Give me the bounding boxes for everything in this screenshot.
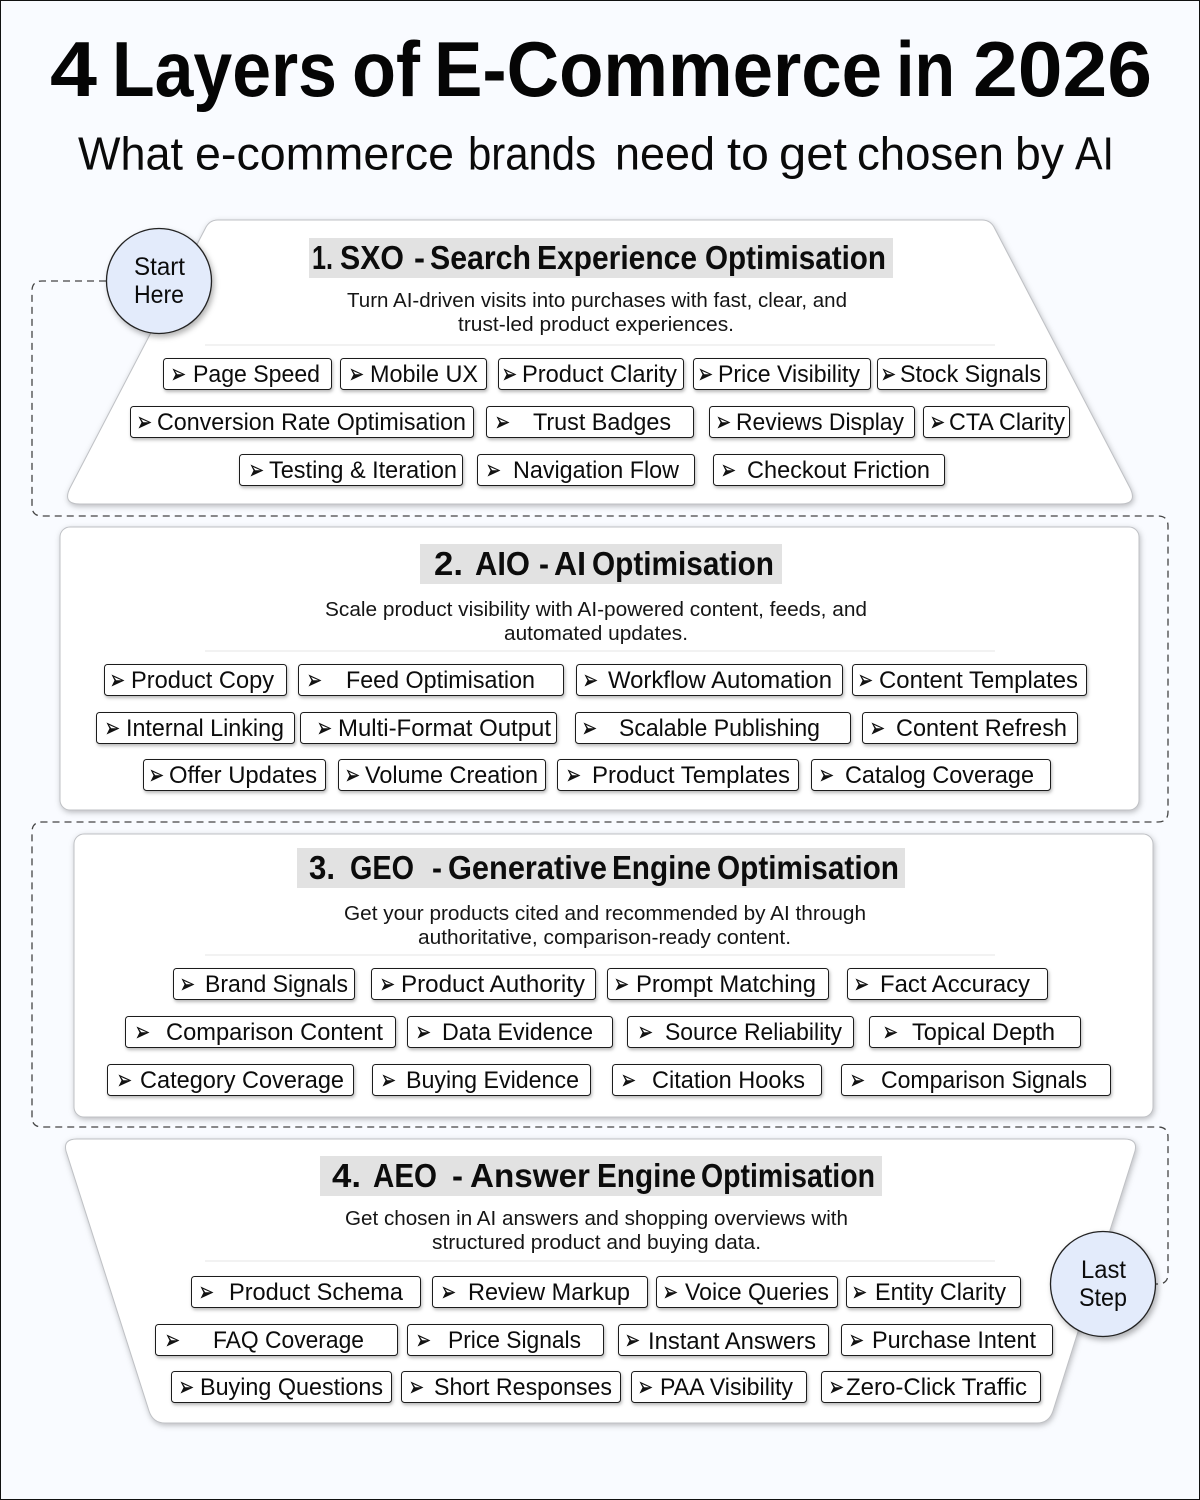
description: AIO: automated updates.	[504, 622, 688, 645]
tag: Purchase Intent: Purchase Intent	[872, 1327, 1036, 1354]
heading: AIO: AIO	[475, 545, 530, 582]
title	[50, 25, 1152, 113]
description: AIO: Scale product visibility with AI-powered content, feeds, and	[325, 598, 867, 621]
tag: Product Copy	[104, 664, 286, 696]
tag: Workflow Automation: Workflow Automation	[608, 667, 832, 694]
heading: AIO: AI	[554, 545, 586, 582]
tag: Mobile UX	[340, 358, 486, 390]
heading: SXO: SXO	[340, 239, 404, 276]
heading: SXO: Experience	[537, 239, 697, 276]
heading: GEO: 3.	[309, 849, 335, 886]
tag: Comparison Signals: Comparison Signals	[881, 1067, 1087, 1094]
title: in	[896, 25, 955, 113]
tag: Product Authority: Product Authority	[401, 971, 585, 998]
tag: Review Markup: Review Markup	[468, 1279, 630, 1306]
heading: AEO: Engine	[597, 1157, 696, 1194]
subtitle: chosen	[857, 128, 1004, 180]
tag: Content Refresh: Content Refresh	[896, 715, 1067, 742]
subtitle: e-commerce	[195, 128, 454, 180]
tag: Internal Linking: Internal Linking	[126, 715, 284, 742]
badge: Last Step	[1050, 1232, 1156, 1336]
title: Layers	[112, 25, 337, 113]
heading: GEO: GEO	[350, 849, 414, 886]
tag: Data Evidence: Data Evidence	[442, 1019, 593, 1046]
tag: Source Reliability: Source Reliability	[665, 1019, 842, 1046]
heading: AIO	[420, 544, 782, 584]
tag: Product Clarity: Product Clarity	[522, 361, 677, 388]
title: 2026	[973, 25, 1152, 113]
subtitle: get	[779, 128, 847, 180]
heading: AEO: 4.	[332, 1157, 361, 1194]
tag: Voice Queries: Voice Queries	[685, 1279, 829, 1306]
tag: Review Markup	[432, 1276, 648, 1308]
subtitle	[78, 128, 1114, 180]
tag: Buying Evidence: Buying Evidence	[406, 1067, 579, 1094]
description: GEO	[344, 902, 866, 949]
tag: Price Signals	[408, 1324, 604, 1356]
tag: PAA Visibility: PAA Visibility	[660, 1374, 793, 1401]
tag: Entity Clarity	[846, 1276, 1020, 1308]
description: AEO	[345, 1207, 848, 1254]
description: SXO	[347, 289, 847, 336]
tag: Zero-Click Traffic: Zero-Click Traffic	[846, 1374, 1027, 1401]
tag: Volume Creation: Volume Creation	[365, 762, 538, 789]
tag: CTA Clarity: CTA Clarity	[949, 409, 1065, 436]
heading: GEO: Generative	[448, 849, 607, 886]
description: SXO: trust-led product experiences.	[458, 313, 734, 336]
tag: Fact Accuracy: Fact Accuracy	[880, 971, 1030, 998]
panel: AEO	[65, 1139, 1136, 1423]
tag: Purchase Intent	[842, 1324, 1052, 1356]
tag: Content Templates: Content Templates	[879, 667, 1078, 694]
tag: Scalable Publishing	[576, 712, 850, 744]
tag: Price Visibility: Price Visibility	[718, 361, 860, 388]
tag: Data Evidence	[408, 1016, 612, 1048]
tag: Feed Optimisation: Feed Optimisation	[346, 667, 535, 694]
dashed connector path	[32, 281, 1168, 1284]
tag: Feed Optimisation	[298, 664, 564, 696]
title: 4	[50, 25, 97, 113]
tag: Citation Hooks	[612, 1064, 822, 1096]
heading: GEO: -	[432, 849, 442, 886]
tag: Offer Updates: Offer Updates	[169, 762, 317, 789]
tag: Product Schema	[192, 1276, 420, 1308]
tag: Instant Answers: Instant Answers	[648, 1328, 816, 1355]
heading: SXO: Search	[430, 239, 531, 276]
tag: Citation Hooks: Citation Hooks	[652, 1067, 805, 1094]
tag: FAQ Coverage: FAQ Coverage	[213, 1327, 364, 1354]
tag: Buying Questions: Buying Questions	[200, 1374, 383, 1401]
tag: Entity Clarity: Entity Clarity	[875, 1279, 1006, 1306]
subtitle: What	[78, 128, 183, 180]
panel shape: AIO rectangle	[60, 527, 1139, 810]
heading: AEO	[320, 1156, 882, 1196]
tag: Navigation Flow	[478, 454, 694, 486]
description: SXO: Turn AI-driven visits into purchases with fast, clear, and	[347, 289, 847, 312]
badge: Last Step: Step	[1079, 1284, 1127, 1312]
heading: AEO: Optimisation	[701, 1157, 875, 1194]
tag: Conversion Rate Optimisation: Conversion Rate Optimisation	[157, 409, 466, 436]
tag: Product Schema: Product Schema	[229, 1279, 404, 1306]
panel: SXO	[68, 220, 1132, 504]
badge: Start Here: Here	[134, 281, 184, 309]
subtitle: to	[727, 128, 769, 180]
tag: Product Copy: Product Copy	[131, 667, 274, 694]
subtitle: brands	[468, 128, 596, 180]
panel shape: SXO trapezoid	[68, 220, 1132, 504]
tag: Fact Accuracy	[848, 968, 1048, 1000]
tag: Navigation Flow: Navigation Flow	[513, 457, 680, 484]
tag: Trust Badges	[486, 406, 694, 438]
heading: AEO: AEO	[373, 1157, 437, 1194]
tag: Comparison Signals	[842, 1064, 1110, 1096]
heading: GEO: Optimisation	[717, 849, 899, 886]
heading: SXO	[309, 238, 893, 278]
heading: AIO: Optimisation	[592, 545, 774, 582]
description: AEO: Get chosen in AI answers and shopping overviews with	[345, 1207, 848, 1230]
tag: Testing & Iteration: Testing & Iteration	[269, 457, 457, 484]
tag: Product Templates: Product Templates	[592, 762, 790, 789]
tag: Category Coverage: Category Coverage	[140, 1067, 344, 1094]
description: GEO: authoritative, comparison-ready content.	[418, 926, 791, 949]
tag: Price Signals: Price Signals	[448, 1327, 581, 1354]
tag: Trust Badges: Trust Badges	[533, 409, 671, 436]
tag: Multi-Format Output: Multi-Format Output	[338, 715, 551, 742]
tag: Brand Signals: Brand Signals	[205, 971, 348, 998]
subtitle: need	[615, 128, 715, 180]
tag: Comparison Content: Comparison Content	[166, 1019, 383, 1046]
panel shape: GEO rectangle	[74, 834, 1153, 1117]
badge: Start Here	[106, 228, 212, 334]
description: AIO	[325, 598, 867, 645]
tag: Mobile UX: Mobile UX	[370, 361, 478, 388]
tag: Topical Depth: Topical Depth	[912, 1019, 1055, 1046]
tag: Short Responses: Short Responses	[434, 1374, 612, 1401]
tag: Prompt Matching: Prompt Matching	[636, 971, 816, 998]
tag: PAA Visibility	[632, 1372, 806, 1402]
heading: SXO: Optimisation	[705, 239, 886, 276]
heading: AEO: -	[452, 1157, 463, 1194]
tag: Reviews Display: Reviews Display	[736, 409, 904, 436]
tag: Checkout Friction: Checkout Friction	[747, 457, 930, 484]
panel: AIO	[60, 527, 1139, 810]
panel shape: AEO inverted trapezoid	[65, 1139, 1136, 1423]
tag: FAQ Coverage	[156, 1324, 398, 1356]
heading: GEO	[297, 848, 905, 888]
title: E-Commerce	[434, 25, 882, 113]
panel: GEO	[74, 834, 1153, 1117]
heading: GEO: Engine	[612, 849, 711, 886]
heading: SXO: -	[414, 239, 425, 276]
subtitle: by	[1015, 128, 1064, 180]
tag: Page Speed: Page Speed	[193, 361, 320, 388]
heading: AIO: -	[539, 545, 549, 582]
description: AEO: structured product and buying data.	[432, 1231, 761, 1254]
heading: SXO: 1.	[312, 239, 333, 276]
heading: AIO: 2.	[434, 545, 463, 582]
tag: Page Speed	[164, 358, 332, 390]
subtitle: AI	[1075, 128, 1114, 180]
tag: Catalog Coverage: Catalog Coverage	[845, 762, 1034, 789]
tag: Stock Signals: Stock Signals	[900, 361, 1041, 388]
tag: Topical Depth	[870, 1016, 1080, 1048]
description: GEO: Get your products cited and recommended by AI through	[344, 902, 866, 925]
title: of	[352, 25, 421, 113]
heading: AEO: Answer	[470, 1157, 590, 1194]
tag: Scalable Publishing: Scalable Publishing	[619, 715, 820, 742]
badge: Last Step: Last	[1081, 1256, 1126, 1284]
badge: Start Here: Start	[134, 253, 185, 281]
